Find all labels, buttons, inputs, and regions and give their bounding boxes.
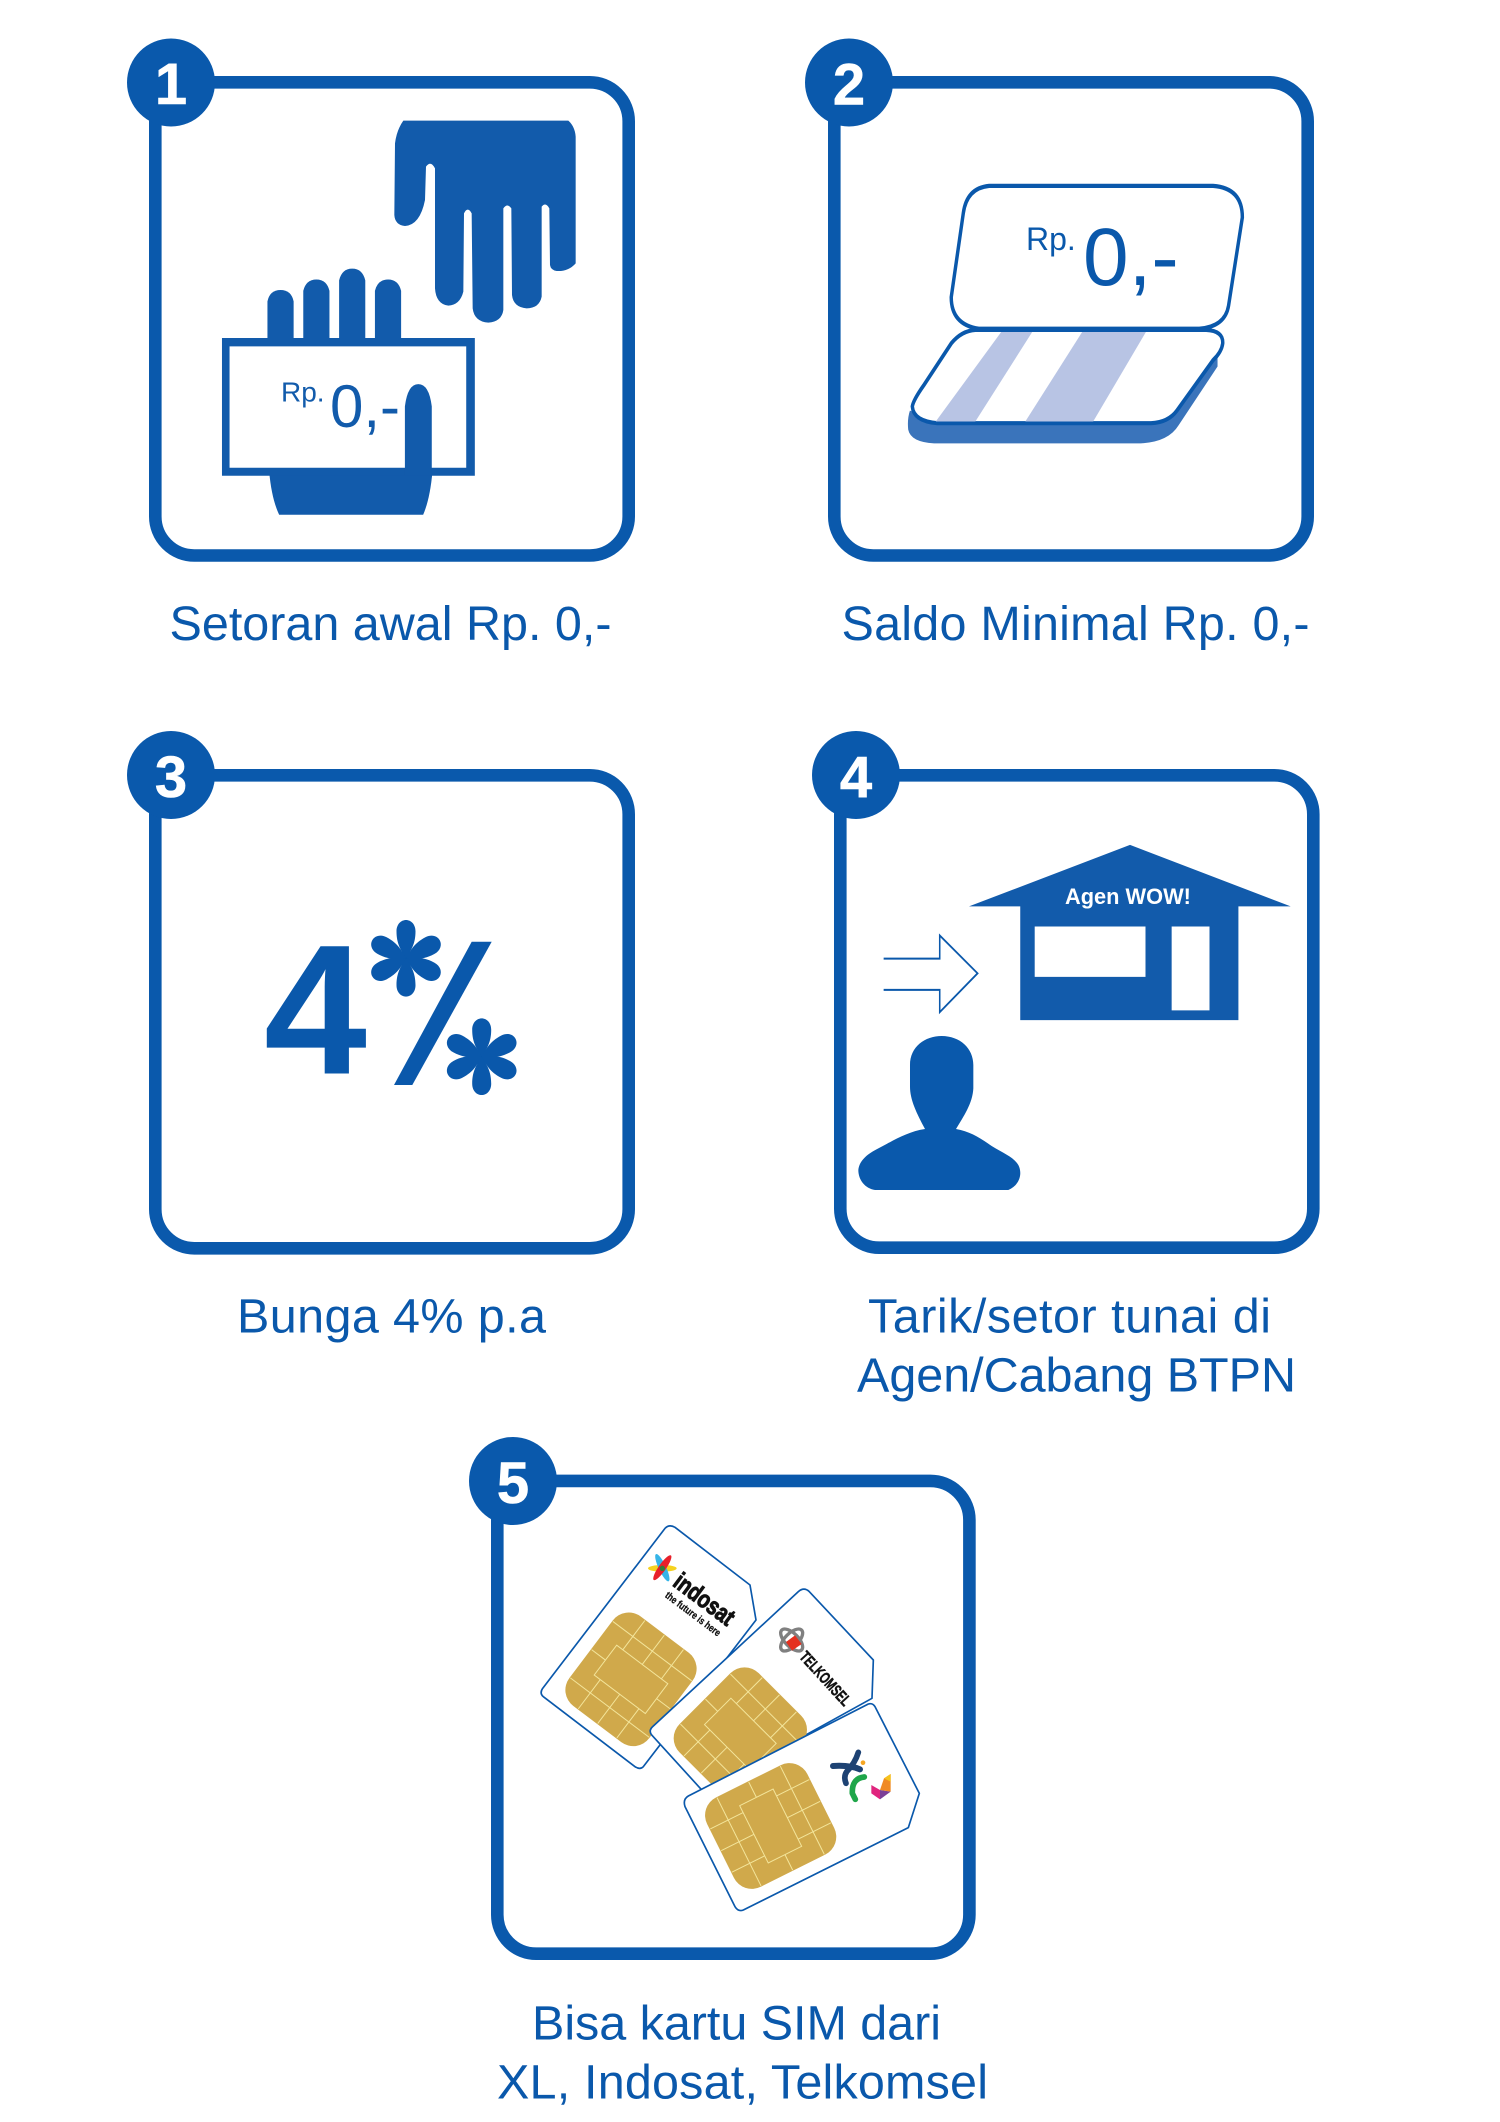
icon: hand from above: [394, 121, 576, 323]
number badge 1: [127, 38, 215, 126]
logo: Telkomsel: TELKOMSEL: [796, 1649, 854, 1710]
frame 2: [834, 82, 1308, 556]
number badge 2: [805, 38, 893, 126]
number badge 2: 2: [833, 52, 865, 118]
number badge 3: [127, 731, 215, 819]
icon: hand holding banknote: 0,-: [330, 373, 400, 440]
caption 3: Bunga 4% p.a: [237, 1290, 546, 1344]
logo: Indosat: [648, 1553, 740, 1639]
frame 4: [840, 775, 1313, 1248]
icon: agent shop: [969, 845, 1291, 1020]
SIM card: Telkomsel: [650, 1589, 873, 1809]
SIM card: XL: [684, 1704, 919, 1911]
caption 4: Tarik/setor tunai di: [868, 1290, 1271, 1344]
caption 5: Bisa kartu SIM dari: [532, 1996, 941, 2050]
icon: open savings book: 0,-: [1083, 212, 1179, 303]
logo: XL: [833, 1752, 891, 1799]
icon: person: [858, 1036, 1020, 1190]
panel 2: minimum balance: [805, 38, 1310, 651]
number badge 1: 1: [155, 52, 187, 117]
number badge 4: [812, 731, 900, 819]
icon: hand holding banknote: [222, 269, 475, 515]
panel 5: SIM cards: [469, 1437, 988, 2110]
logo: Telkomsel: [777, 1625, 854, 1710]
icon: open savings book: [908, 186, 1242, 443]
icon: 4 percent symbol: [264, 908, 520, 1114]
number badge 4: 4: [840, 745, 872, 810]
shop sign: Agen WOW!: [1065, 884, 1191, 909]
caption 4: Agen/Cabang BTPN: [857, 1348, 1296, 1402]
caption 1: Setoran awal Rp. 0,-: [170, 597, 612, 651]
frame 5: [497, 1481, 969, 1954]
number badge 5: [469, 1437, 557, 1525]
logo: Indosat: the future is here: [663, 1590, 723, 1639]
number badge 5: 5: [497, 1451, 529, 1516]
caption 5: XL, Indosat, Telkomsel: [497, 2056, 988, 2110]
caption 5: [497, 1996, 988, 2110]
caption 2: Saldo Minimal Rp. 0,-: [842, 597, 1310, 651]
icon: arrow: [884, 935, 978, 1012]
panel 4: cash at agents: [812, 731, 1313, 1402]
panel 3: interest rate: [127, 731, 629, 1344]
SIM card: Indosat: [541, 1526, 756, 1768]
book amount: Rp.: [1026, 221, 1076, 257]
icon: 4 percent symbol: 4: [264, 908, 367, 1114]
caption 4: [857, 1290, 1296, 1402]
frame 1: [155, 82, 629, 556]
panel 1: initial deposit: [127, 38, 629, 651]
icon: SIM cards: [541, 1526, 919, 1911]
number badge 3: 3: [155, 745, 187, 810]
frame 3: [155, 775, 629, 1248]
logo: Indosat: indosat: [668, 1568, 740, 1632]
banknote amount: Rp.: [281, 376, 325, 407]
